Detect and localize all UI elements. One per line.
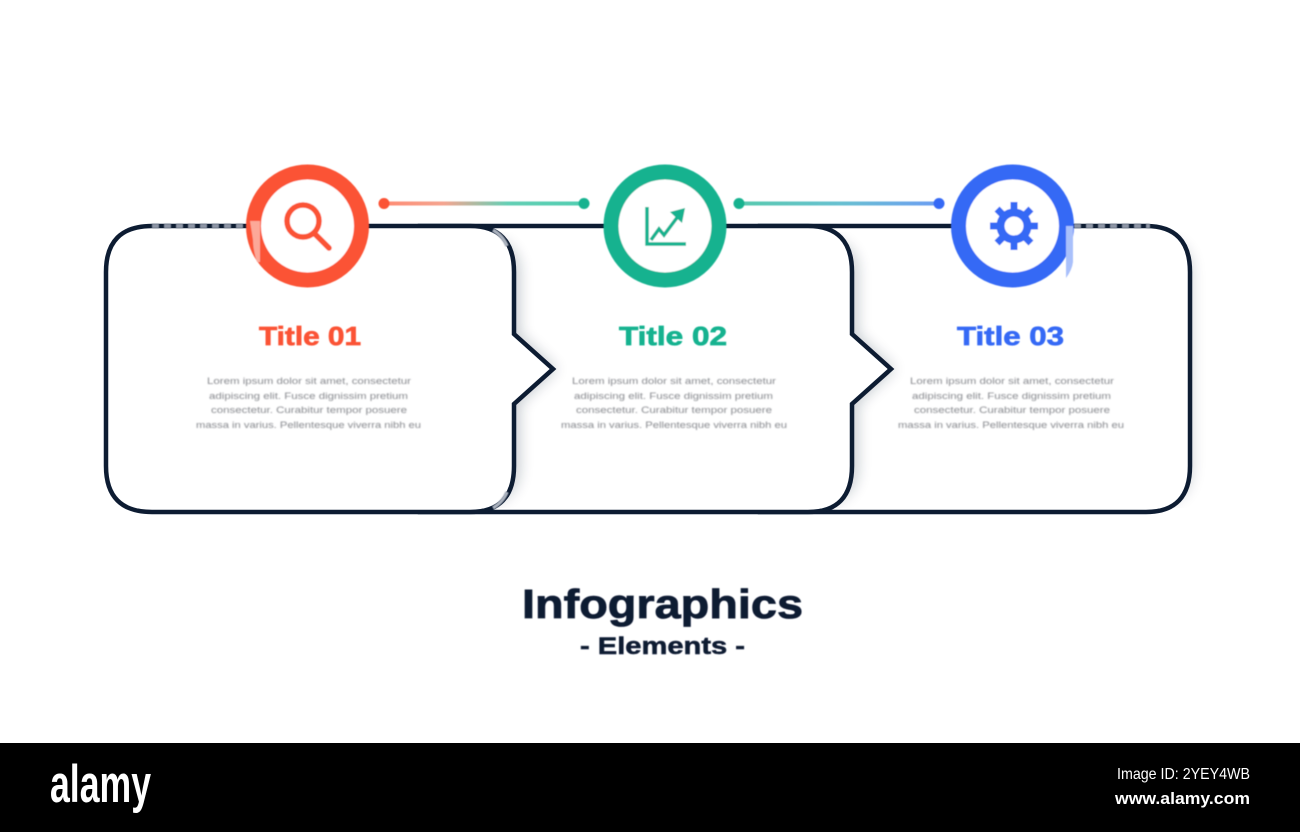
shadow of step 3 panel bbox=[1178, 242, 1198, 504]
speckled segment of top border, right bbox=[1074, 224, 1150, 228]
footer bar bbox=[0, 743, 1300, 832]
panel: step 1 outline bbox=[106, 226, 553, 512]
panel: step 2 outline bbox=[420, 226, 891, 512]
text block: step 2 description: consectetur. Curabitur tempor posuere bbox=[576, 405, 772, 415]
worn corners of step 1 panel bbox=[493, 230, 507, 508]
connector: step 2 to step 3 bbox=[734, 198, 944, 209]
footer logo: alamy bbox=[50, 755, 151, 814]
shadow of step 2 panel bbox=[836, 236, 897, 508]
speckled segment of top border, left bbox=[152, 224, 246, 228]
text block: step 2 description: massa in varius. Pellentesque viverra nibh eu bbox=[561, 420, 787, 430]
panel: step 3 outline bbox=[760, 226, 1190, 512]
text block: step 1 description: consectetur. Curabitur tempor posuere bbox=[211, 405, 407, 415]
footer image id: Image ID: 2YEY4WB bbox=[1117, 766, 1250, 783]
text block: step 1 description bbox=[196, 376, 421, 430]
text block: step 3 description bbox=[898, 376, 1124, 430]
heading: title 01: Title 01 bbox=[259, 321, 361, 351]
text block: step 2 description: adipiscing elit. Fusce dignissim pretium bbox=[574, 391, 773, 401]
text block: step 1 description: Lorem ipsum dolor sit amet, consectetur bbox=[207, 376, 411, 386]
connector: step 1 to step 2 bbox=[378, 198, 590, 209]
subtitle: - Elements - bbox=[580, 633, 745, 660]
heading: title 02: Title 02 bbox=[619, 321, 727, 351]
text block: step 2 description bbox=[561, 376, 787, 430]
icon: gear badge bbox=[958, 172, 1073, 280]
shadow of step 1 panel bbox=[498, 236, 559, 508]
main title: Infographics bbox=[522, 581, 803, 627]
text block: step 3 description: massa in varius. Pellentesque viverra nibh eu bbox=[898, 420, 1124, 430]
text block: step 1 description: adipiscing elit. Fusce dignissim pretium bbox=[209, 391, 408, 401]
text block: step 3 description: adipiscing elit. Fusce dignissim pretium bbox=[912, 391, 1111, 401]
text block: step 3 description: Lorem ipsum dolor sit amet, consectetur bbox=[910, 376, 1114, 386]
icon: growth chart badge bbox=[611, 172, 719, 280]
text block: step 1 description: massa in varius. Pellentesque viverra nibh eu bbox=[196, 420, 421, 430]
text block: step 2 description: Lorem ipsum dolor sit amet, consectetur bbox=[572, 376, 776, 386]
heading: title 03: Title 03 bbox=[957, 321, 1064, 351]
icon: search badge bbox=[250, 172, 362, 280]
footer website: www.alamy.com bbox=[1114, 789, 1250, 808]
text block: step 3 description: consectetur. Curabitur tempor posuere bbox=[914, 405, 1110, 415]
